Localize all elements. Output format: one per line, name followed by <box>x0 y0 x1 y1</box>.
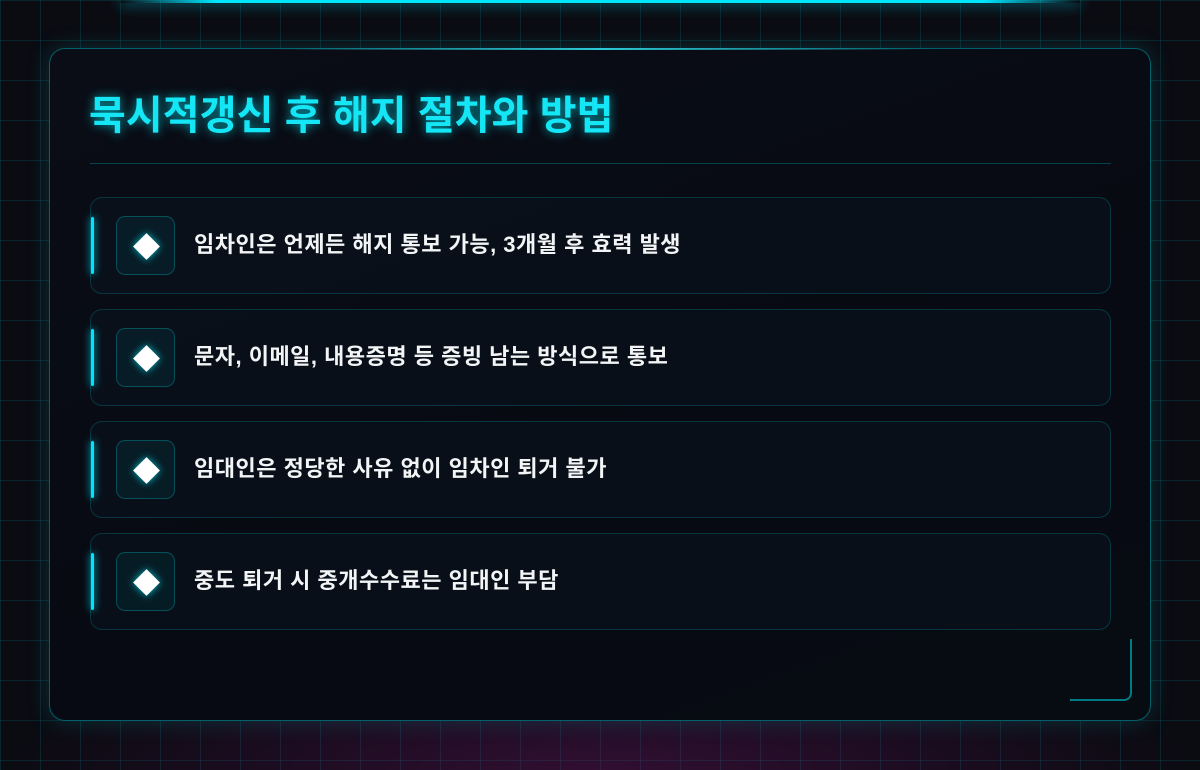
text 4: 중도 퇴거 시 중개수수료는 임대인 부담 <box>194 568 559 593</box>
text 1: 임차인은 언제든 해지 통보 가능, 3개월 후 효력 발생 <box>194 232 681 257</box>
text 2: 문자, 이메일, 내용증명 등 증빙 남는 방식으로 통보 <box>194 344 668 369</box>
icon: diamond <box>116 552 175 611</box>
item 1 <box>90 197 1111 294</box>
text 3: 임대인은 정당한 사유 없이 임차인 퇴거 불가 <box>194 456 607 481</box>
icon: diamond <box>116 440 175 499</box>
title: 묵시적갱신 후 해지 절차와 방법 <box>89 94 614 138</box>
item 2 <box>90 309 1111 406</box>
icon: diamond <box>116 328 175 387</box>
icon: diamond <box>116 216 175 275</box>
item 3 <box>90 421 1111 518</box>
item 4 <box>90 533 1111 630</box>
corner bracket <box>1070 639 1132 701</box>
